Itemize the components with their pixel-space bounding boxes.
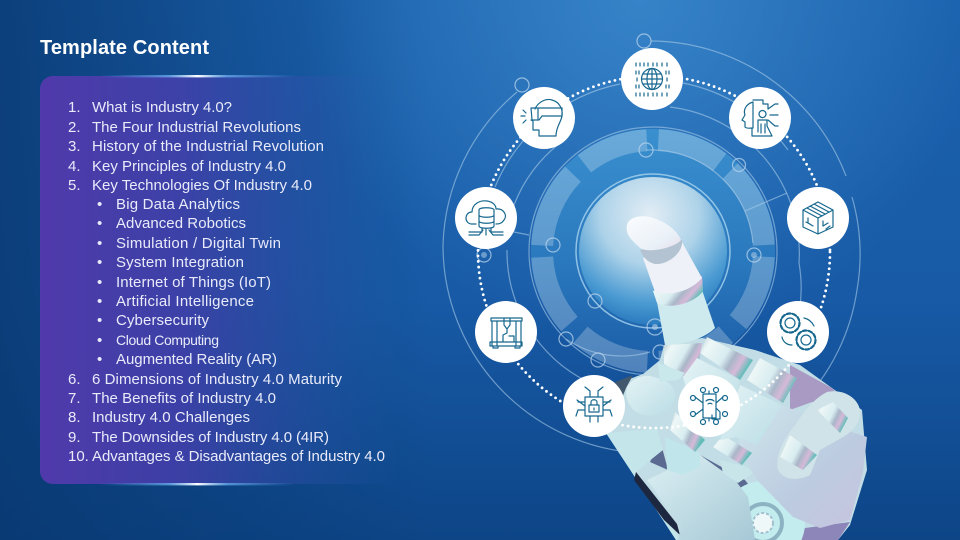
title: Template Content xyxy=(40,37,209,59)
text block: numbered list: 6 Dimensions of Industry 4.0 Maturity xyxy=(92,371,342,388)
text block: numbered list: Augmented Reality (AR) xyxy=(116,351,277,368)
text block: numbered list: 8. xyxy=(68,409,81,426)
text block: numbered list: 1. xyxy=(68,99,81,116)
text block: numbered list: 5. xyxy=(68,177,81,194)
icon: cyber lock chip xyxy=(563,375,625,437)
text block: numbered list: 10. xyxy=(68,448,89,465)
hand: base silhouette xyxy=(606,338,867,540)
text block: numbered list: Big Data Analytics xyxy=(116,196,240,213)
text block: numbered list: Advanced Robotics xyxy=(116,215,246,232)
hand: right finger xyxy=(777,391,860,479)
text block: numbered list: • xyxy=(97,254,102,271)
text block: numbered list: 2. xyxy=(68,119,81,136)
icon: gears xyxy=(767,301,829,363)
robot hand xyxy=(606,216,867,540)
text block: numbered list: • xyxy=(97,351,102,368)
icon: IoT phone network xyxy=(678,375,740,437)
hand: right palm xyxy=(737,405,867,528)
text block: numbered list: • xyxy=(97,293,102,310)
icon: VR headset xyxy=(513,87,575,149)
icon: circuit cube xyxy=(787,187,849,249)
text block: numbered list: Advantages & Disadvantages of Industry 4.0 xyxy=(92,448,385,465)
text block: numbered list: Cybersecurity xyxy=(116,312,210,329)
hand: metal accents xyxy=(650,365,860,540)
text block: numbered list: The Downsides of Industry 4.0 (4IR) xyxy=(92,429,329,446)
dotted orbit xyxy=(478,76,830,428)
icon: cloud database xyxy=(455,187,517,249)
hand: knuckle chrome xyxy=(664,337,797,465)
text block: numbered list: System Integration xyxy=(116,254,244,271)
text block: numbered list: What is Industry 4.0? xyxy=(92,99,232,116)
text block: numbered list: The Four Industrial Revolutions xyxy=(92,119,301,136)
text block: numbered list: Internet of Things (IoT) xyxy=(116,274,271,291)
text block: numbered list: • xyxy=(97,312,102,329)
text block: numbered list xyxy=(68,99,385,465)
hand: finger segments xyxy=(683,358,782,445)
text block: numbered list: Key Technologies Of Industry 4.0 xyxy=(92,177,312,194)
icon: AI head xyxy=(729,87,791,149)
text block: numbered list: • xyxy=(97,332,102,349)
text block: numbered list: Artificial Intelligence xyxy=(116,293,254,310)
hand: thumb base xyxy=(606,429,680,540)
text block: numbered list: 6. xyxy=(68,371,81,388)
hand: index finger xyxy=(627,216,715,345)
text block: numbered list: • xyxy=(97,274,102,291)
hand: thumb pad xyxy=(626,376,675,416)
text block: numbered list: • xyxy=(97,196,102,213)
text block: numbered list: Cloud Computing xyxy=(116,332,219,348)
text block: numbered list: 7. xyxy=(68,390,81,407)
text block: numbered list: 4. xyxy=(68,158,81,175)
hand: lower palm xyxy=(647,455,755,540)
icon: 3D printer xyxy=(475,301,537,363)
circular tech dial xyxy=(443,34,860,453)
text block: numbered list: 9. xyxy=(68,429,81,446)
text block: numbered list: Key Principles of Industry 4.0 xyxy=(92,158,286,175)
text block: numbered list: Simulation / Digital Twin xyxy=(116,235,281,252)
text block: numbered list: • xyxy=(97,215,102,232)
text block: numbered list: • xyxy=(97,235,102,252)
panel: contents list xyxy=(40,75,400,485)
icon: big data globe xyxy=(621,48,683,110)
text block: numbered list: The Benefits of Industry 4.0 xyxy=(92,390,276,407)
hand: lower cylinder xyxy=(665,437,700,475)
text block: numbered list: 3. xyxy=(68,138,81,155)
text block: numbered list: History of the Industrial Revolution xyxy=(92,138,324,155)
text block: numbered list: Industry 4.0 Challenges xyxy=(92,409,250,426)
hand: wrist gear xyxy=(721,481,805,540)
